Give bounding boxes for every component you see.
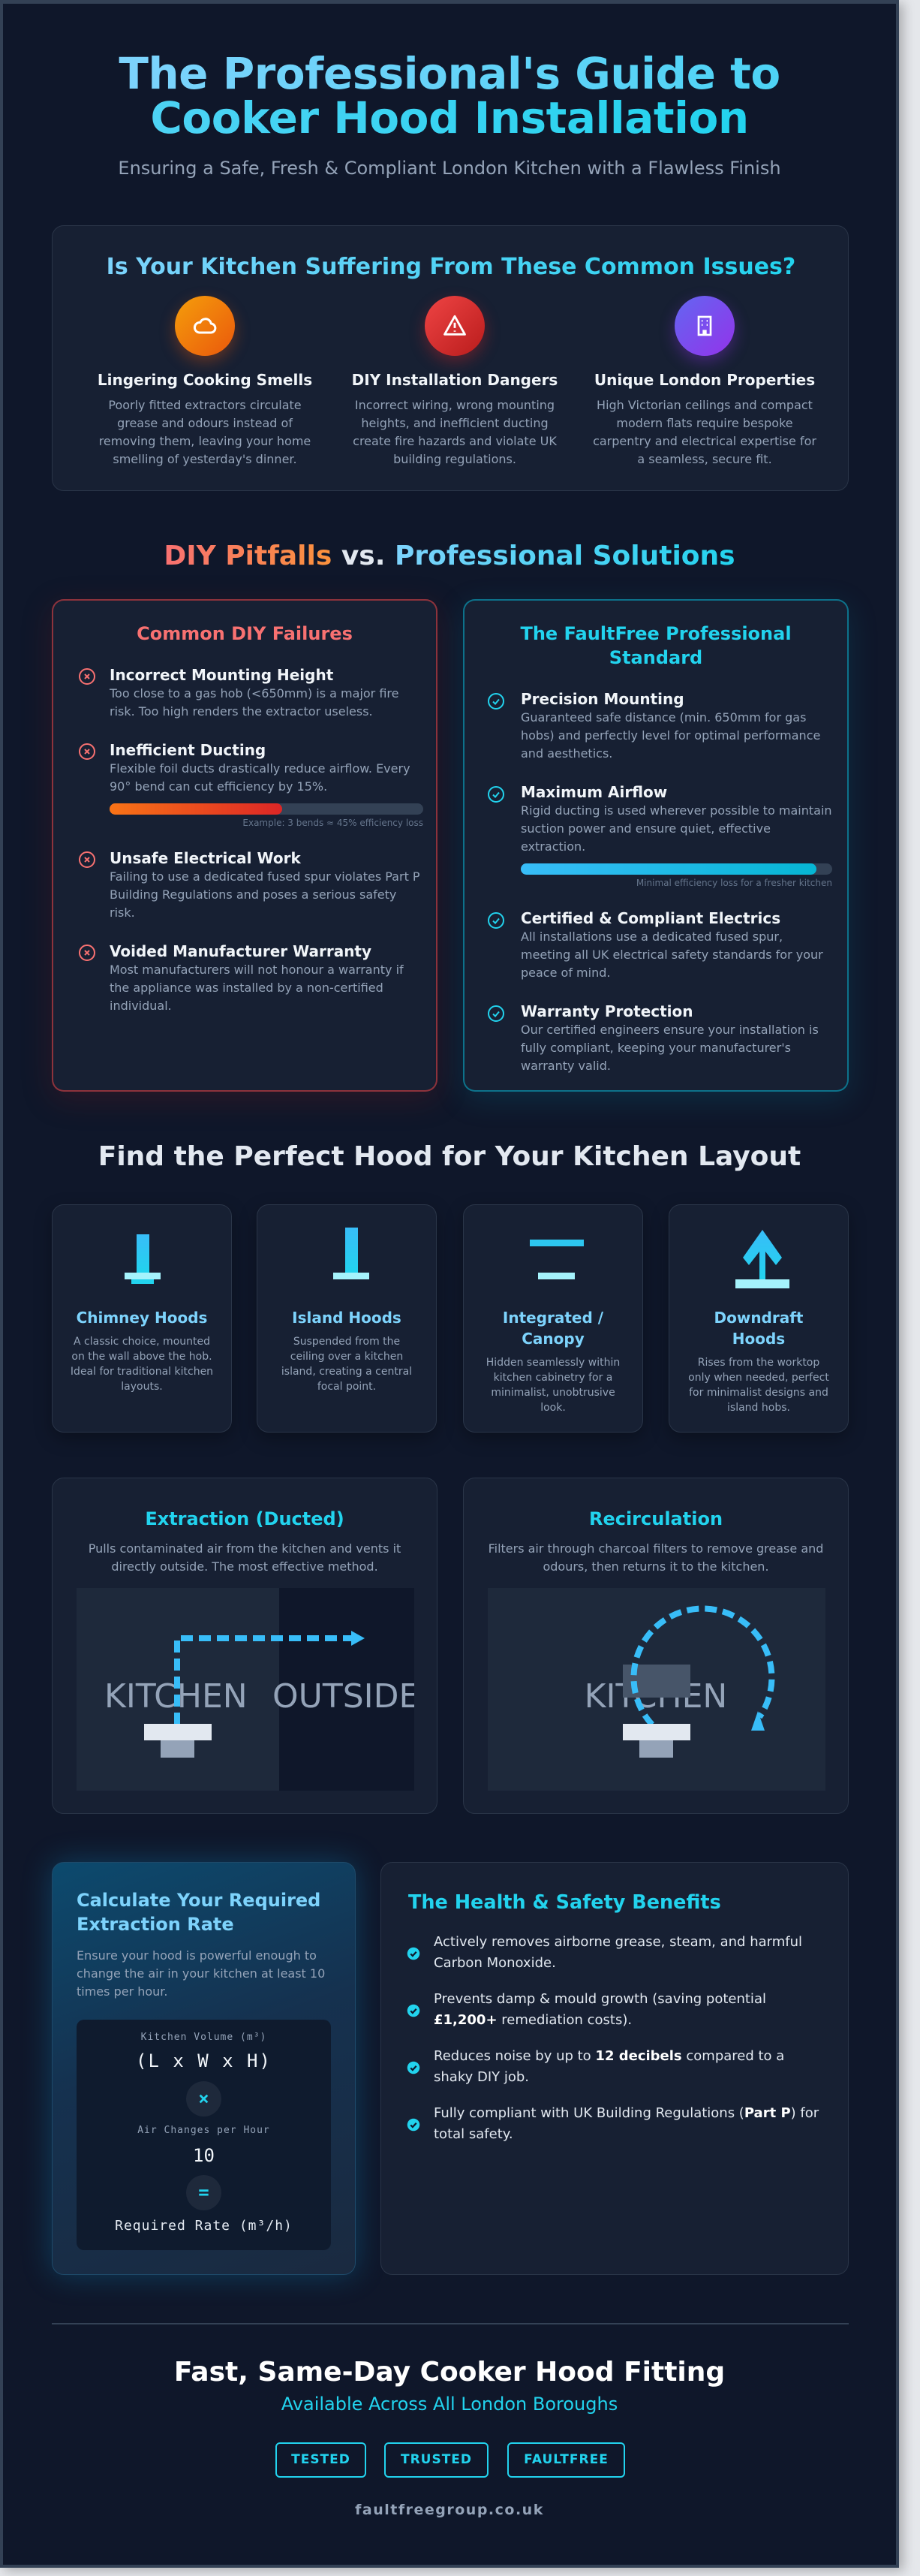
heading: faultfree standard: Standard xyxy=(609,647,702,668)
card: downdraft: Rises from the worktop only when needed, perfect for minimalist designs and island hobs. xyxy=(688,1357,829,1414)
item: precision: Guaranteed safe distance (min. 650mm for gas hobs) and perfectly level for optimal performance and aesthetics. xyxy=(521,710,820,761)
benefit 3 xyxy=(407,2048,784,2085)
card: downdraft: Hoods xyxy=(732,1330,785,1348)
item: warranty: Voided Manufacturer Warranty xyxy=(110,942,371,960)
text: calc desc: Ensure your hood is powerful enough to change the air in your kitchen at least 10 times per hour. xyxy=(77,1948,325,1999)
heading: common issues: Is Your Kitchen Suffering From These Common Issues? xyxy=(107,254,795,280)
diagram: recirculation xyxy=(488,1588,825,1791)
badge: faultfree: FAULTFREE xyxy=(524,2452,609,2467)
card: chimney xyxy=(52,1204,232,1433)
benefit 2: £1,200+ remediation costs). xyxy=(434,2012,632,2028)
text: recirculation desc: Filters air through charcoal filters to remove grease and odours, then returns it to the kitchen. xyxy=(489,1541,823,1574)
bar: minimal loss xyxy=(521,863,832,875)
formula box: 10 xyxy=(193,2145,215,2166)
panel: professional standard xyxy=(463,599,849,1092)
icon: downdraft arrow xyxy=(735,1230,789,1288)
diagram: ducted xyxy=(77,1588,414,1791)
bar: efficiency loss xyxy=(110,803,423,815)
benefit 2: Prevents damp & mould growth (saving potential xyxy=(434,1991,766,2007)
item: precision xyxy=(488,690,820,761)
badge: tested xyxy=(275,2442,366,2478)
card: chimney: A classic choice, mounted on the wall above the hob. Ideal for traditional kitchen layouts. xyxy=(71,1336,213,1393)
issue: london properties: High Victorian ceilings and compact modern flats require bespoke carpentry and electrical expertise for a seamless, secure fit. xyxy=(593,398,816,466)
item: airflow: Minimal efficiency loss for a fresher kitchen xyxy=(636,878,832,888)
title: The Professional's Guide to xyxy=(119,48,780,99)
badge: faultfree xyxy=(507,2442,625,2478)
card: island xyxy=(257,1204,437,1433)
issue: diy dangers: DIY Installation Dangers xyxy=(352,371,558,389)
benefit 1: Actively removes airborne grease, steam, and harmful Carbon Monoxide. xyxy=(434,1934,802,1971)
issue: diy dangers: Incorrect wiring, wrong mounting heights, and inefficient ducting create fire hazards and violate UK building regulations. xyxy=(353,398,557,466)
card: chimney: Chimney Hoods xyxy=(77,1309,207,1327)
item: ducting: Inefficient Ducting xyxy=(110,741,266,759)
item: warranty protection: Our certified engineers ensure your installation is fully compliant, keeping your manufacturer's warranty valid. xyxy=(521,1023,819,1073)
formula box xyxy=(77,2020,331,2250)
badge: trusted: TRUSTED xyxy=(401,2452,472,2467)
card: downdraft: Downdraft xyxy=(714,1309,803,1327)
item: warranty protection xyxy=(488,1002,819,1073)
item: electrical: Failing to use a dedicated fused spur violates Part P Building Regulations and poses a serious safety risk. xyxy=(110,869,420,920)
heading: extraction: Extraction (Ducted) xyxy=(145,1508,344,1529)
issue: london properties: Unique London Properties xyxy=(594,371,815,389)
text: extraction desc: Pulls contaminated air from the kitchen and vents it directly outside. The most effective method. xyxy=(89,1541,401,1574)
heading: faultfree standard xyxy=(520,623,792,668)
benefit 2 xyxy=(407,1991,766,2028)
panel: diy failures xyxy=(52,599,437,1092)
card: integrated: Canopy xyxy=(522,1330,585,1348)
heading: health & safety: The Health & Safety Benefits xyxy=(408,1891,721,1914)
footer heading: Fast, Same-Day Cooker Hood Fitting xyxy=(174,2357,725,2388)
website: faultfreegroup.co.uk xyxy=(355,2502,544,2518)
item: precision: Precision Mounting xyxy=(521,690,684,708)
item: airflow: Rigid ducting is used wherever possible to maintain suction power and ensure quiet, effective extraction. xyxy=(521,803,832,854)
title xyxy=(119,48,780,143)
diagram: ducted: KITCHEN xyxy=(104,1677,248,1716)
issue: smells xyxy=(98,294,312,466)
item: mounting height: Incorrect Mounting Height xyxy=(110,666,333,684)
panel: calculator xyxy=(52,1862,356,2275)
item: electrics: All installations use a dedicated fused spur, meeting all UK electrical safety standards for your peace of mind. xyxy=(521,929,823,980)
item: warranty xyxy=(79,942,404,1013)
formula box: Required Rate (m³/h) xyxy=(115,2218,293,2234)
icon: cloud xyxy=(175,296,235,356)
card: integrated: Integrated / xyxy=(503,1309,603,1327)
card: integrated: Hidden seamlessly within kitchen cabinetry for a minimalist, unobtrusive look. xyxy=(486,1357,620,1414)
icon: integrated hood xyxy=(530,1240,584,1279)
issue: smells: Lingering Cooking Smells xyxy=(98,371,312,389)
icon: building xyxy=(675,296,735,356)
item: ducting: Example: 3 bends ≈ 45% efficiency loss xyxy=(242,818,423,828)
issue: diy dangers xyxy=(352,294,558,466)
formula box: (L x W x H) xyxy=(136,2050,272,2071)
card: island: Suspended from the ceiling over a kitchen island, creating a central focal point. xyxy=(281,1336,412,1393)
heading: common diy failures: Common DIY Failures xyxy=(137,623,353,644)
panel: health benefits xyxy=(380,1862,849,2275)
item: ducting xyxy=(79,741,423,828)
heading: diy vs pro: DIY Pitfalls vs. Professional Solutions xyxy=(164,541,735,571)
card: island: Island Hoods xyxy=(292,1309,401,1327)
heading: hood types: Find the Perfect Hood for Your Kitchen Layout xyxy=(98,1141,801,1172)
panel: common issues xyxy=(52,225,849,491)
item: electrical xyxy=(79,849,420,920)
item: mounting height xyxy=(79,666,399,719)
icon: multiply xyxy=(186,2081,221,2117)
icon: equals xyxy=(186,2175,221,2210)
diagram: recirculation: KITCHEN xyxy=(585,1677,727,1716)
subtitle: Ensuring a Safe, Fresh & Compliant London Kitchen with a Flawless Finish xyxy=(118,158,781,179)
badge: trusted xyxy=(384,2442,489,2478)
badge: tested: TESTED xyxy=(291,2452,350,2467)
item: electrical: Unsafe Electrical Work xyxy=(110,849,301,867)
icon: multiply: × xyxy=(198,2088,209,2109)
icon: chimney hood xyxy=(125,1234,161,1284)
footer subheading: Available Across All London Boroughs xyxy=(281,2394,618,2415)
heading: calculate: Calculate Your Required Extraction Rate xyxy=(77,1890,320,1935)
item: electrics xyxy=(488,909,823,980)
item: warranty: Most manufacturers will not honour a warranty if the appliance was installed by a non-certified individual. xyxy=(110,963,404,1013)
formula box: Air Changes per Hour xyxy=(137,2125,270,2136)
icon: equals: = xyxy=(198,2182,209,2203)
item: warranty protection: Warranty Protection xyxy=(521,1002,693,1020)
item: ducting: Flexible foil ducts drastically reduce airflow. Every 90° bend can cut efficiency by 15%. xyxy=(110,761,410,794)
item: airflow xyxy=(488,783,832,888)
issue: smells: Poorly fitted extractors circulate grease and odours instead of removing them, leaving your home smelling of yesterday's dinner. xyxy=(99,398,311,466)
issue: london properties xyxy=(593,294,816,466)
heading: faultfree standard: The FaultFree Professional xyxy=(520,623,792,644)
icon: warning xyxy=(425,296,485,356)
icon: island hood xyxy=(333,1228,369,1279)
card: downdraft xyxy=(669,1204,849,1433)
item: mounting height: Too close to a gas hob (<650mm) is a major fire risk. Too high renders the extractor useless. xyxy=(110,686,399,719)
benefit 3: Reduces noise by up to 12 decibels compared to a xyxy=(434,2048,784,2064)
panel: recirculation xyxy=(463,1478,849,1814)
benefit 4: Fully compliant with UK Building Regulations (Part P) for total safety. xyxy=(434,2105,819,2142)
panel: extraction ducted xyxy=(52,1478,437,1814)
benefit 3: shaky DIY job. xyxy=(434,2069,529,2085)
heading: recirculation: Recirculation xyxy=(589,1508,723,1529)
formula box: Kitchen Volume (m³) xyxy=(141,2032,266,2043)
item: electrics: Certified & Compliant Electrics xyxy=(521,909,780,927)
card: integrated xyxy=(463,1204,643,1433)
item: airflow: Maximum Airflow xyxy=(521,783,667,801)
title: Cooker Hood Installation xyxy=(150,92,749,143)
